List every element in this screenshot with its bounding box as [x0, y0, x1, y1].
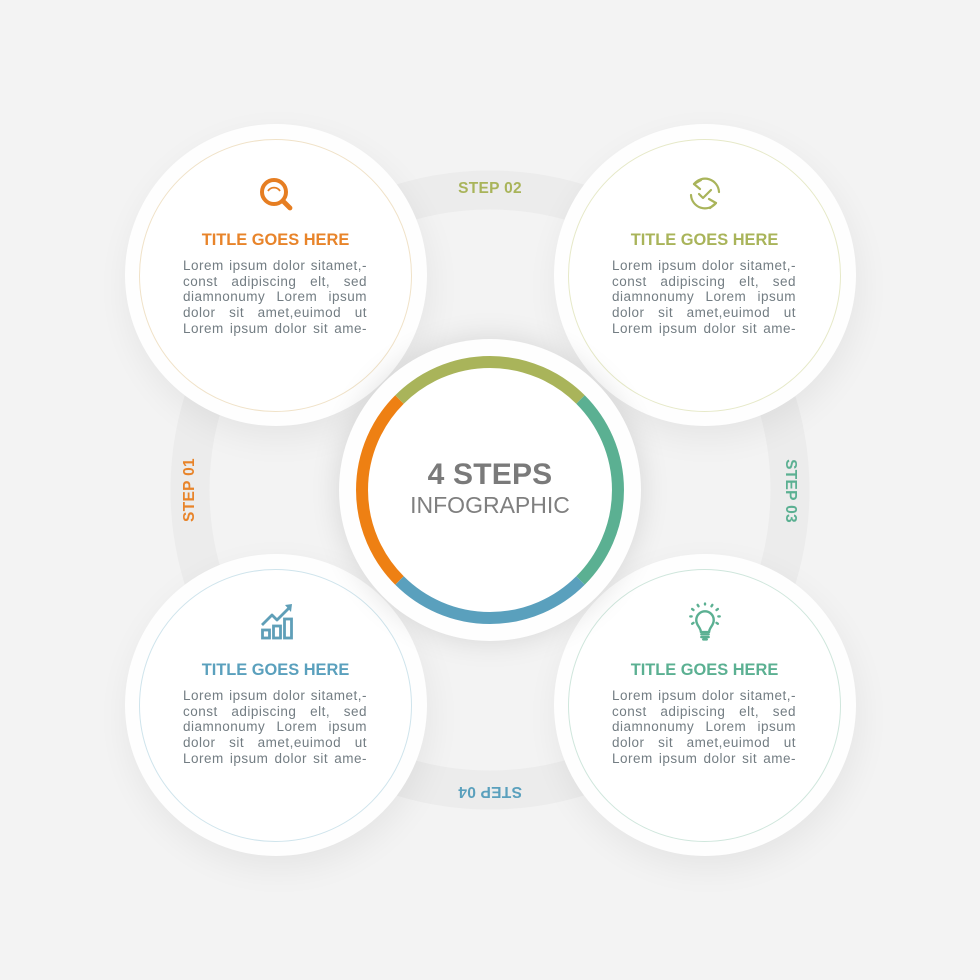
- text block: step 04 body: diamnonumy Lorem ipsum: [183, 719, 367, 734]
- text block: step 01 body: Lorem ipsum dolor sit ame-: [183, 321, 367, 336]
- heading: step 04 title: TITLE GOES HERE: [202, 661, 349, 679]
- icon: refresh check: [690, 178, 720, 210]
- icon: growth chart: [261, 604, 293, 640]
- text block: step 04 body: Lorem ipsum dolor sit ame-: [183, 751, 367, 766]
- heading: infographic: INFOGRAPHIC: [410, 492, 570, 518]
- text block: step 03 body: diamnonumy Lorem ipsum: [612, 719, 796, 734]
- text block: step 02 body: Lorem ipsum dolor sitamet,-: [612, 258, 796, 273]
- label: step 03: STEP 03: [782, 459, 799, 523]
- text block: step 01 body: diamnonumy Lorem ipsum: [183, 289, 367, 304]
- heading: 4 steps: 4 STEPS: [428, 458, 552, 491]
- chart: four-colour ring: [356, 356, 624, 624]
- label: step 01: STEP 01: [181, 458, 198, 522]
- panel: step 02 check: [554, 124, 856, 426]
- icon: light bulb: [689, 602, 721, 641]
- text block: step 04 body: dolor sit amet,euimod ut: [183, 735, 367, 750]
- text block: step 03 body: [612, 688, 796, 766]
- panel: center hub: [339, 339, 641, 641]
- text block: step 03 body: Lorem ipsum dolor sit ame-: [612, 751, 796, 766]
- text block: step 01 body: Lorem ipsum dolor sitamet,-: [183, 258, 367, 273]
- text block: step 02 body: const adipiscing elt, sed: [612, 274, 796, 289]
- text block: step 02 body: [612, 258, 796, 336]
- label: step 04: STEP 04: [458, 783, 522, 800]
- heading: step 01 title: TITLE GOES HERE: [202, 231, 349, 249]
- text block: step 03 body: dolor sit amet,euimod ut: [612, 735, 796, 750]
- text block: step 04 body: [183, 688, 367, 766]
- panel: step 03 idea: [554, 554, 856, 856]
- text block: step 04 body: const adipiscing elt, sed: [183, 704, 367, 719]
- text block: step 02 body: dolor sit amet,euimod ut: [612, 305, 796, 320]
- text block: step 04 body: Lorem ipsum dolor sitamet,-: [183, 688, 367, 703]
- text block: step 01 body: dolor sit amet,euimod ut: [183, 305, 367, 320]
- heading: step 02 title: TITLE GOES HERE: [631, 231, 778, 249]
- text block: step 01 body: [183, 258, 367, 336]
- label: step 02: STEP 02: [458, 180, 522, 197]
- panel: step 01 search: [124, 124, 426, 426]
- text block: step 03 body: const adipiscing elt, sed: [612, 704, 796, 719]
- text block: step 02 body: diamnonumy Lorem ipsum: [612, 289, 796, 304]
- text block: step 03 body: Lorem ipsum dolor sitamet,-: [612, 688, 796, 703]
- heading: step 03 title: TITLE GOES HERE: [631, 661, 778, 679]
- panel: step 04 chart: [124, 554, 426, 856]
- text block: step 01 body: const adipiscing elt, sed: [183, 274, 367, 289]
- text block: step 02 body: Lorem ipsum dolor sit ame-: [612, 321, 796, 336]
- icon: magnifying glass: [260, 178, 292, 210]
